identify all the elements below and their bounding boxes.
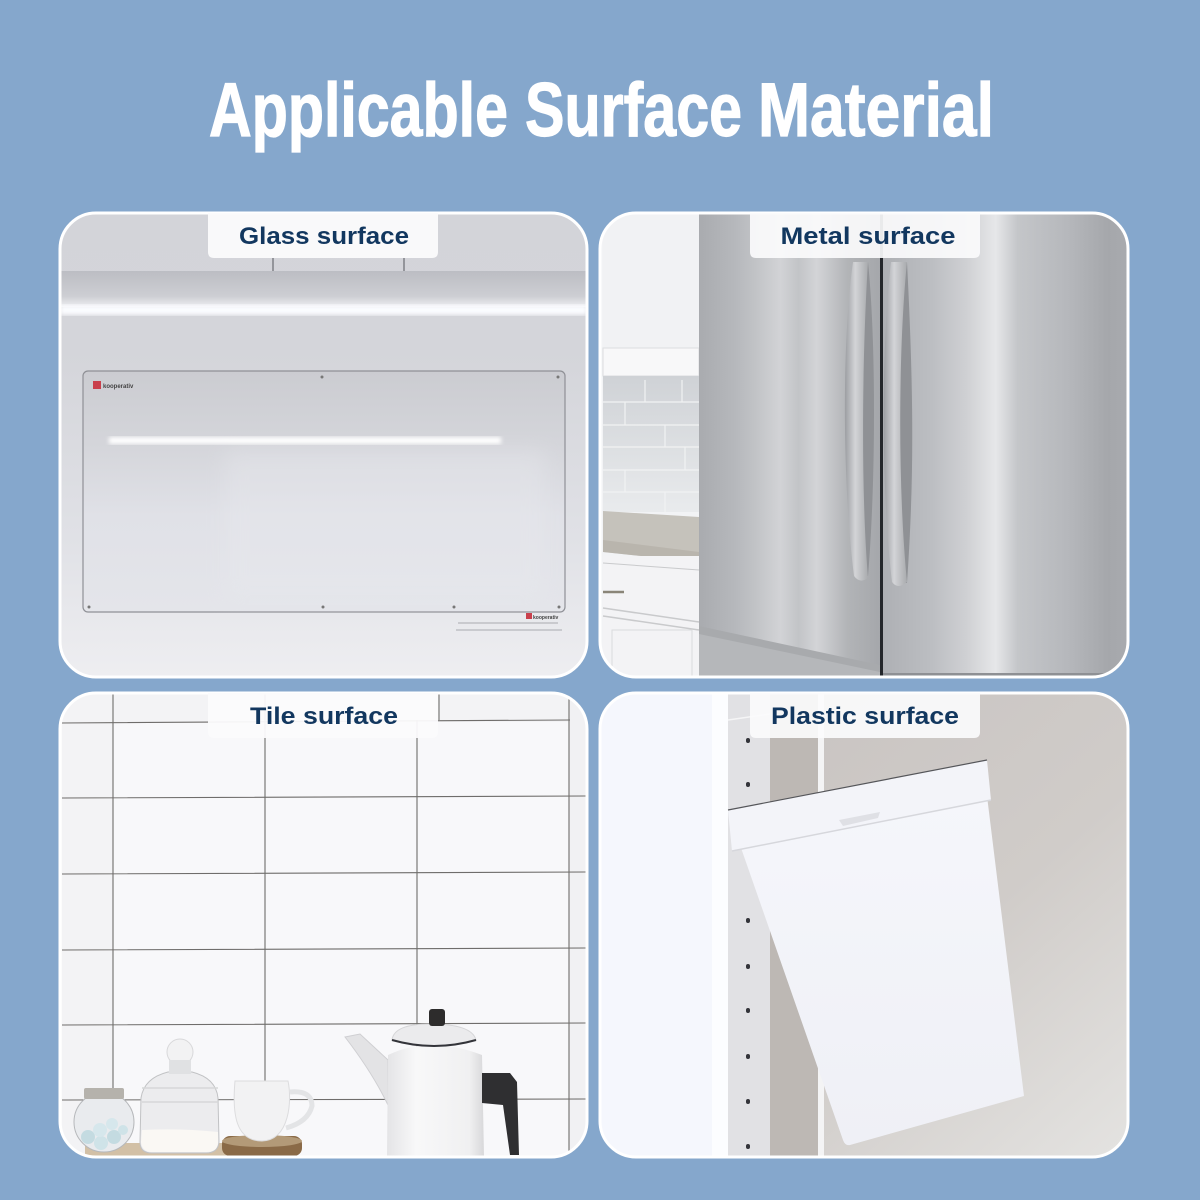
glass jars (74, 1039, 219, 1153)
kettle (345, 1009, 519, 1157)
glass board: kooperativ (103, 384, 134, 390)
panel borders (60, 213, 1128, 1157)
panel: tile surface (60, 693, 589, 1157)
label: tile surface (208, 693, 438, 738)
title: Applicable (209, 68, 508, 153)
counter (85, 1143, 227, 1156)
title (209, 68, 994, 153)
label: tile surface: Tile surface (250, 703, 398, 730)
title: Material (758, 68, 994, 153)
wood board and cup (222, 1081, 312, 1156)
label: plastic surface (750, 693, 980, 738)
fridge handles (845, 262, 912, 586)
panel: metal surface (600, 213, 1128, 677)
shelf rail (728, 693, 824, 1157)
label: plastic surface: Plastic surface (771, 703, 959, 730)
tray with logo: kooperativ (533, 615, 559, 621)
panel: glass surface (60, 213, 587, 677)
fridge doors (699, 213, 1128, 677)
glass board (83, 371, 565, 612)
label: glass surface (208, 213, 438, 258)
label: metal surface: Metal surface (780, 223, 956, 250)
title: Surface (525, 68, 742, 153)
tray with logo (456, 613, 562, 630)
cabinet and backsplash (602, 348, 699, 676)
tile grid (60, 693, 586, 1157)
label: metal surface (750, 213, 980, 258)
plastic bin (728, 760, 1024, 1145)
label: glass surface: Glass surface (239, 223, 409, 250)
panel: plastic surface (600, 693, 1128, 1157)
